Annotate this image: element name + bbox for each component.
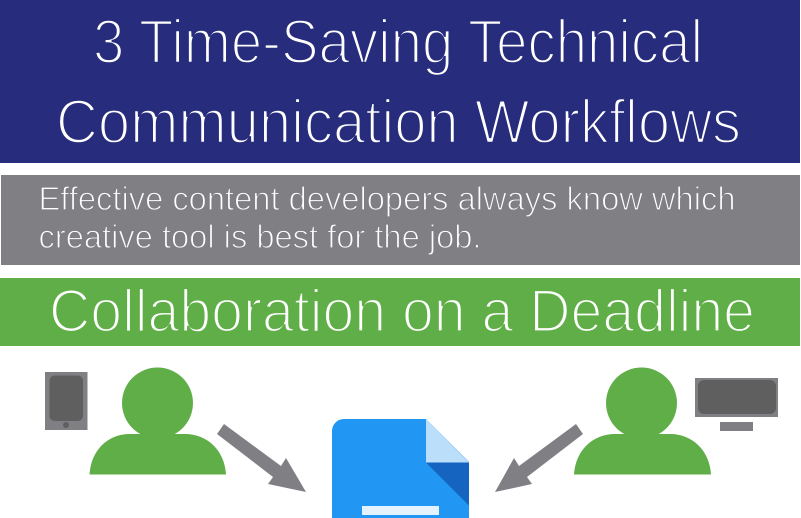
panel: intro statement — [1, 175, 800, 265]
intro text: Effective content developers always know which — [38, 181, 736, 218]
icon: right person — [574, 368, 711, 474]
arrow: left person to document — [217, 424, 306, 492]
panel: section heading — [0, 278, 800, 346]
intro text: creative tool is best for the job. — [38, 219, 482, 256]
icon: document — [332, 419, 469, 518]
panel: title banner — [0, 0, 800, 163]
title: 3 Time-Saving Technical — [93, 8, 703, 77]
intro text — [38, 181, 736, 256]
icon: left person — [90, 368, 226, 474]
section heading text: Collaboration on a Deadline — [49, 278, 755, 344]
icon: desktop monitor — [695, 378, 778, 431]
arrow: right person to document — [495, 424, 583, 492]
icon: tablet — [45, 372, 88, 430]
title: Communication Workflows — [56, 88, 741, 157]
title — [56, 8, 741, 157]
